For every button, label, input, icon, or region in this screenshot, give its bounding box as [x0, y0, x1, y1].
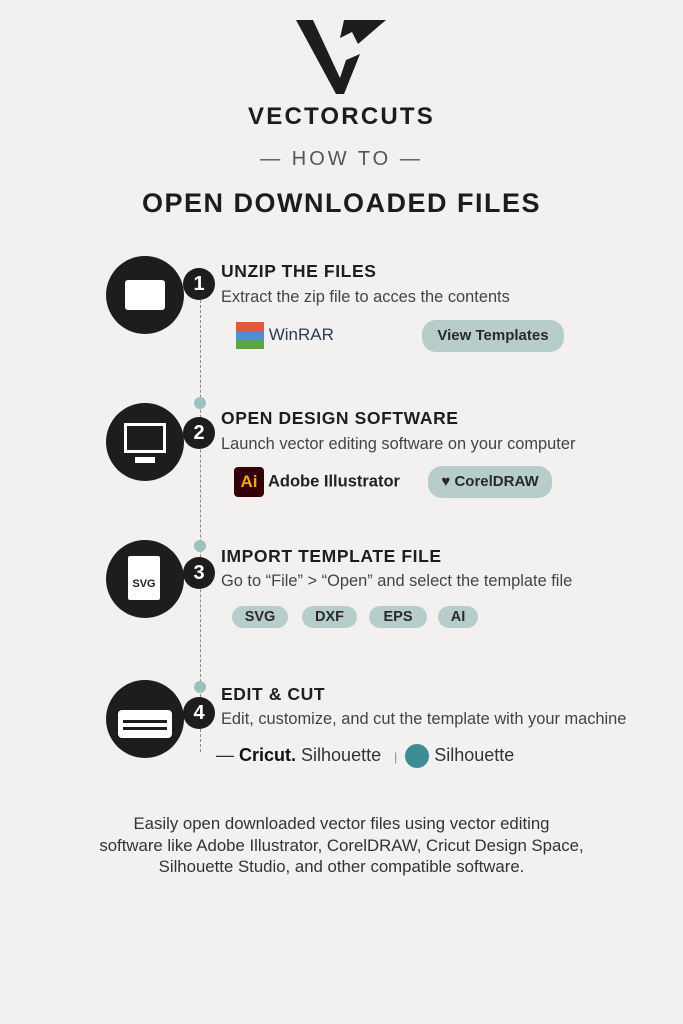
teal dot 4 [194, 681, 206, 693]
icon: folder [106, 256, 184, 334]
title: OPEN DOWNLOADED FILES [142, 188, 541, 218]
step 4 [106, 680, 626, 768]
icon: svg file [106, 540, 184, 618]
format pills [232, 606, 478, 628]
icon: monitor [106, 403, 184, 481]
subtitle: — HOW TO — [260, 148, 423, 170]
coreldraw pill [428, 466, 552, 498]
teal dot 3 [194, 540, 206, 552]
coreldraw pill: ♥ CorelDRAW [441, 473, 539, 490]
icon: svg file: SVG [132, 578, 156, 590]
format pills: AI [451, 609, 465, 625]
desc: Extract the zip file to acces the contents [221, 288, 510, 306]
brand name: VECTORCUTS [248, 103, 435, 130]
heading: IMPORT TEMPLATE FILE [221, 546, 442, 566]
format pills: DXF [315, 609, 344, 625]
badge 1: 1 [193, 273, 205, 295]
desc: Go to “File” > “Open” and select the template file [221, 572, 572, 590]
step 3 [106, 540, 572, 628]
format pills: SVG [245, 609, 275, 625]
badge 1 [183, 268, 215, 300]
winrar: WinRAR [269, 325, 334, 344]
teal dot 2 [194, 397, 206, 409]
illustrator: Adobe Illustrator [268, 472, 400, 490]
badge 2: 2 [193, 422, 205, 444]
desc: Launch vector editing software on your computer [221, 435, 575, 453]
heading: OPEN DESIGN SOFTWARE [221, 408, 459, 428]
view templates pill: View Templates [437, 327, 549, 344]
view templates pill [422, 320, 564, 352]
illustrator [234, 467, 400, 497]
step 1 [106, 256, 564, 352]
icon: cutter [106, 680, 184, 758]
heading: EDIT & CUT [221, 684, 325, 704]
footer text: Silhouette Studio, and other compatible software. [159, 857, 524, 876]
format pills: EPS [383, 609, 412, 625]
badge 4: 4 [193, 702, 205, 724]
footer text [99, 814, 584, 876]
timeline line [200, 300, 201, 752]
heading: UNZIP THE FILES [221, 261, 376, 281]
brands: — Cricut. Silhouette | Silhouette [216, 745, 514, 765]
desc: Edit, customize, and cut the template with your machine [221, 710, 626, 728]
badge 2 [183, 417, 215, 449]
winrar [236, 322, 334, 349]
badge 3: 3 [193, 562, 205, 584]
illustrator: Ai [240, 472, 258, 491]
footer text: Easily open downloaded vector files using vector editing [133, 814, 550, 833]
badge 3 [183, 557, 215, 589]
footer text: software like Adobe Illustrator, CorelDRAW, Cricut Design Space, [99, 836, 584, 854]
logo [296, 20, 386, 94]
step 2 [106, 403, 576, 498]
badge 4 [183, 697, 215, 729]
